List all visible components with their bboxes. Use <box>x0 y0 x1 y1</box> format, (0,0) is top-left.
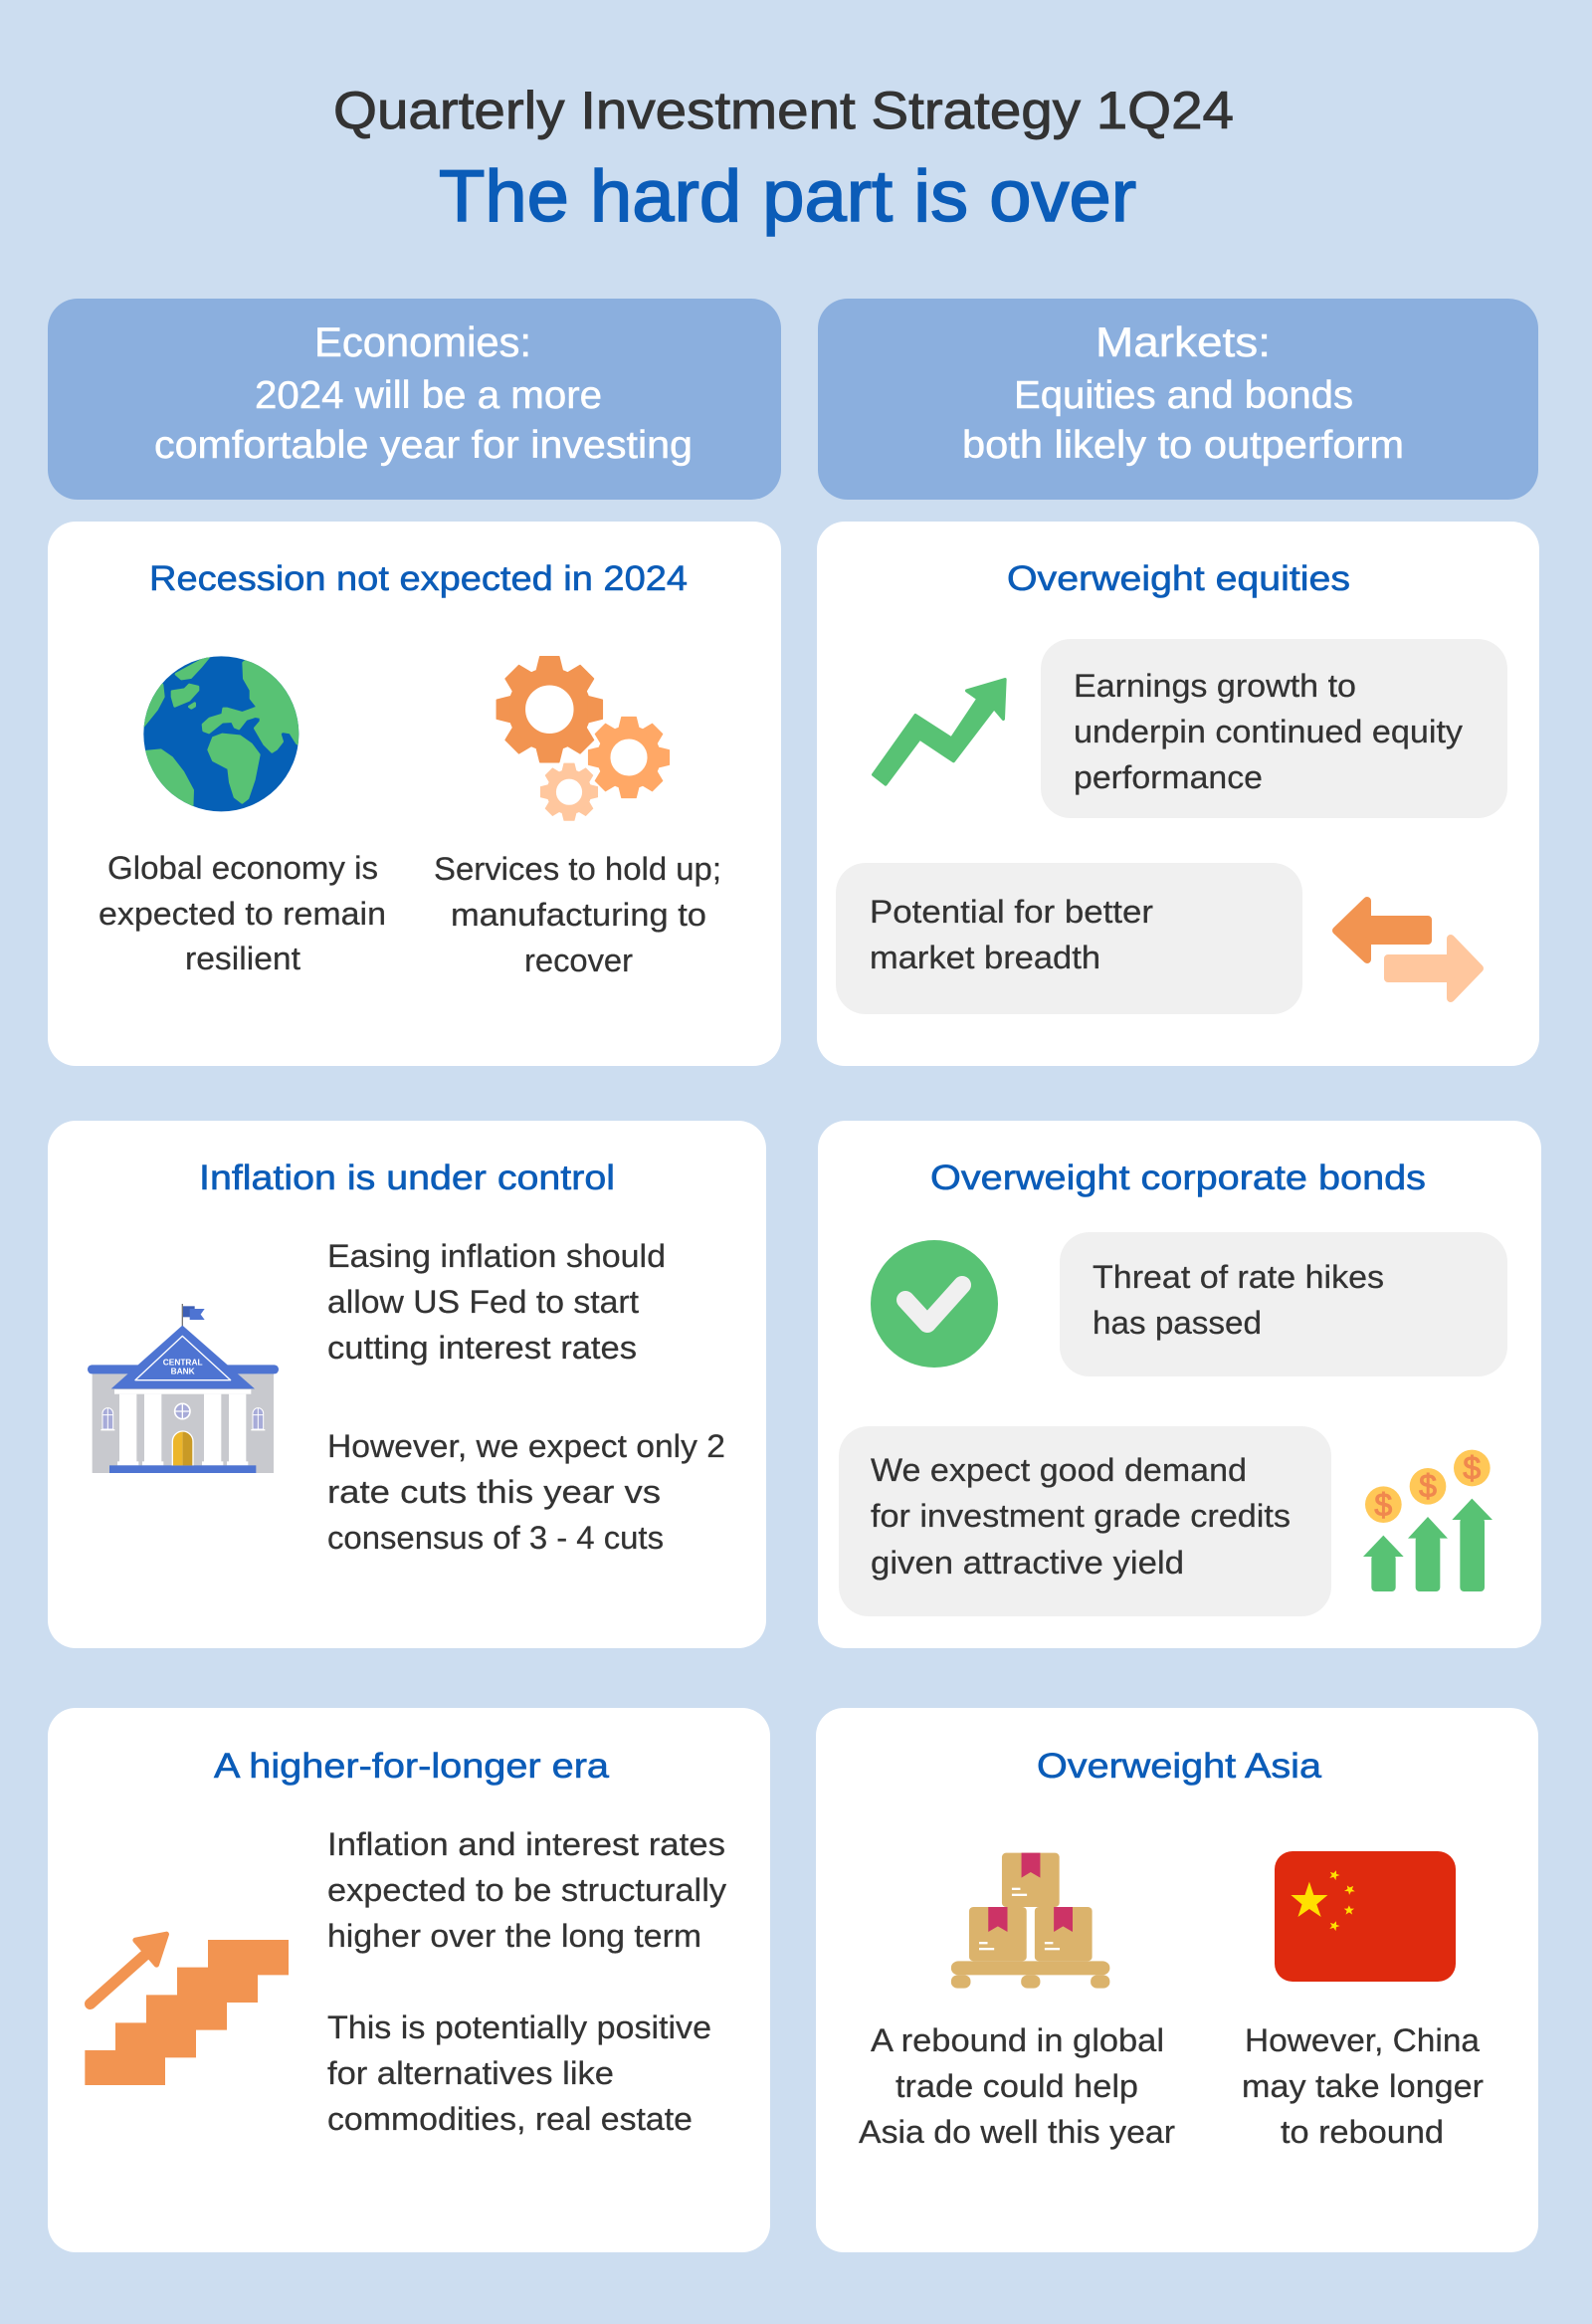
text: structurally higher rates: higher over the long term <box>327 1918 701 1954</box>
icon: globe <box>136 656 306 813</box>
panel: economies header <box>48 299 781 500</box>
panel: markets header <box>818 299 1538 500</box>
header text: economies: 2024 will be a more <box>255 374 602 417</box>
icon: coins and rising arrows: $ <box>1374 1487 1392 1523</box>
callout: earnings growth: Earnings growth to <box>1074 668 1356 704</box>
panel: overweight equities <box>817 522 1539 1066</box>
header text: markets: Markets: <box>1095 318 1271 365</box>
panel: recession not expected <box>48 522 781 1066</box>
icon: coins and rising arrows <box>1363 1450 1492 1591</box>
text: global economy: resilient <box>185 941 300 976</box>
heading: Overweight Asia <box>1037 1747 1322 1786</box>
icon: rising zigzag arrow <box>874 680 1005 784</box>
small gear <box>540 763 598 820</box>
text: alternatives <box>327 2009 711 2137</box>
text: alternatives: This is potentially positive <box>327 2009 711 2045</box>
callout: market breadth: market breadth <box>870 940 1100 975</box>
text: structurally higher rates: expected to be structurally <box>327 1872 726 1908</box>
icon: exchange arrows <box>1336 901 1480 998</box>
panel: overweight corporate bonds <box>818 1121 1541 1648</box>
icon: coins and rising arrows: $ <box>1463 1450 1481 1486</box>
callout: market breadth <box>836 863 1302 1014</box>
callout: investment grade demand: for investment grade credits <box>871 1498 1291 1534</box>
callout: rate hikes: has passed <box>1093 1305 1262 1341</box>
callout: investment grade demand <box>839 1426 1331 1616</box>
heading: A higher-for-longer era <box>214 1747 610 1786</box>
title: report name: Quarterly Investment Strategy 1Q24 <box>333 82 1234 140</box>
text: rate cuts expectation: rate cuts this year vs <box>327 1474 661 1510</box>
callout: investment grade demand: given attractive yield <box>871 1545 1184 1581</box>
icon: stairs with arrow <box>85 1934 289 2085</box>
text: global economy <box>99 850 386 976</box>
header text: economies: Economies: <box>314 318 531 365</box>
header text: markets <box>962 318 1404 467</box>
title: headline: The hard part is over <box>439 156 1136 237</box>
text: rate cuts expectation <box>327 1428 725 1556</box>
heading: Inflation is under control <box>199 1159 615 1197</box>
text: easing inflation: cutting interest rates <box>327 1330 637 1366</box>
text: alternatives: for alternatives like <box>327 2055 614 2091</box>
header text: markets: both likely to outperform <box>962 424 1404 467</box>
text: structurally higher rates <box>327 1826 726 1954</box>
panel: higher for longer <box>48 1708 770 2252</box>
text: global trade rebound <box>859 2022 1175 2150</box>
callout: rate hikes <box>1060 1232 1507 1376</box>
panel: overweight asia <box>816 1708 1538 2252</box>
icon: central bank building: BANK <box>171 1366 195 1375</box>
header text: economies: comfortable year for investing <box>154 424 693 467</box>
text: china rebound <box>1242 2022 1484 2150</box>
text: services and manufacturing: Services to hold up; <box>434 851 721 887</box>
callout: earnings growth: underpin continued equity <box>1074 714 1463 749</box>
callout: market breadth: Potential for better <box>870 894 1153 930</box>
icon: central bank building <box>88 1304 279 1473</box>
heading: Overweight equities <box>1007 559 1350 598</box>
header text: economies <box>154 318 693 467</box>
text: china rebound: may take longer <box>1242 2068 1484 2104</box>
title block <box>333 82 1234 237</box>
panel: inflation under control <box>48 1121 766 1648</box>
icon: coins and rising arrows: $ <box>1419 1468 1437 1504</box>
text: global trade rebound: trade could help <box>896 2068 1138 2104</box>
icon: china flag <box>1275 1851 1456 1982</box>
callout: rate hikes: Threat of rate hikes <box>1093 1259 1384 1295</box>
text: global trade rebound: A rebound in global <box>871 2022 1164 2058</box>
text: rate cuts expectation: consensus of 3 - 4 cuts <box>327 1520 664 1556</box>
icon: gears <box>497 657 669 820</box>
text: global trade rebound: Asia do well this year <box>859 2114 1175 2150</box>
text: china rebound: However, China <box>1245 2022 1480 2058</box>
callout: investment grade demand: We expect good demand <box>871 1452 1247 1488</box>
heading: Recession not expected in 2024 <box>149 559 688 598</box>
text: rate cuts expectation: However, we expect only 2 <box>327 1428 725 1464</box>
callout: earnings growth: performance <box>1074 759 1263 795</box>
text: services and manufacturing: recover <box>524 943 633 978</box>
icon: central bank building: CENTRAL <box>163 1357 203 1367</box>
icon: stacked boxes on pallet <box>951 1853 1109 1989</box>
icon: check mark <box>871 1240 998 1368</box>
text: global economy: expected to remain <box>99 896 386 932</box>
heading: Overweight corporate bonds <box>930 1159 1426 1197</box>
text: services and manufacturing: manufacturing to <box>451 897 706 933</box>
medium gear <box>589 718 669 797</box>
text: easing inflation <box>327 1238 666 1366</box>
text: structurally higher rates: Inflation and interest rates <box>327 1826 725 1862</box>
header text: markets: Equities and bonds <box>1014 374 1353 417</box>
text: easing inflation: Easing inflation should <box>327 1238 666 1274</box>
text: china rebound: to rebound <box>1281 2114 1444 2150</box>
text: easing inflation: allow US Fed to start <box>327 1284 639 1320</box>
text: services and manufacturing <box>434 851 721 978</box>
text: global economy: Global economy is <box>107 850 378 886</box>
callout: earnings growth <box>1041 639 1507 818</box>
large gear <box>497 657 602 762</box>
text: alternatives: commodities, real estate <box>327 2101 693 2137</box>
